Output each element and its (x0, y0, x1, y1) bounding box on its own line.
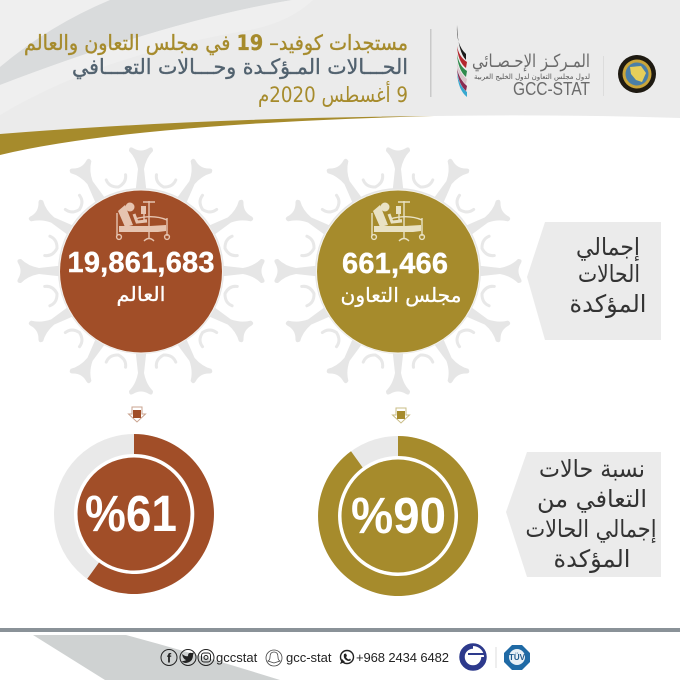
donut: GCC recovery 90% (318, 436, 478, 596)
icon: instagram (198, 650, 214, 666)
panel: recovery ratio label: المؤكدة (554, 545, 630, 573)
header band (0, 0, 680, 155)
panel: recovery ratio label: إجمالي الحالات (526, 515, 656, 544)
icon: hospital bed (117, 201, 169, 241)
panel: total confirmed label (527, 222, 661, 340)
phone number: +968 2434 6482 (356, 650, 449, 665)
handle: gcc-stat (286, 650, 332, 665)
logo Arabic name: المـركـز الإحـصـائي (472, 51, 590, 72)
panel: GCC total (316, 190, 480, 354)
virus background: world (17, 147, 265, 395)
divider (603, 56, 604, 96)
footer bar (0, 628, 680, 632)
panel: world total (59, 190, 223, 354)
arrow: GCC (392, 408, 410, 423)
GCC number: 661,466 (342, 248, 448, 280)
icon: facebook (161, 650, 177, 666)
world label: العالم (116, 282, 166, 306)
arrow: world (128, 407, 146, 422)
icon: twitter (180, 650, 196, 666)
handle: gccstat (216, 650, 258, 665)
icon: whatsapp (340, 650, 354, 664)
logo ribbons (457, 25, 467, 97)
divider (430, 29, 432, 97)
donut: world recovery 61% (64, 434, 214, 594)
panel: recovery ratio label (506, 452, 661, 577)
logo wordmark: GCC-STAT (513, 79, 590, 99)
title line 1: مستجدات كوفيد– 19 في مجلس التعاون والعالم (24, 31, 408, 56)
GCC emblem (618, 55, 656, 93)
panel: total confirmed label: إجمالي (576, 233, 640, 262)
divider (496, 647, 497, 668)
footer social and contacts (161, 650, 449, 666)
icon: snapchat (266, 650, 282, 666)
recovery value: %90 (351, 487, 446, 544)
icon: facebook: f (167, 650, 172, 666)
panel: total confirmed label: المؤكدة (570, 290, 646, 318)
certification logo (462, 646, 484, 668)
TUV logo: TÜV (509, 653, 526, 662)
virus background: GCC (274, 147, 522, 395)
recovery value: %61 (85, 485, 177, 542)
panel: total confirmed label: الحالات (578, 260, 640, 288)
GCC label: مجلس التعاون (340, 283, 462, 307)
title line 2: الحـــالات المـؤكـدة وحـــالات التعـــافي (72, 55, 408, 79)
panel: recovery ratio label: التعافي من (537, 485, 647, 513)
footer grey wedge (33, 635, 280, 680)
title (24, 31, 408, 107)
world number: 19,861,683 (68, 247, 214, 279)
panel: recovery ratio label: نسبة حالات (539, 455, 645, 483)
title line 3: date: 9 أغسطس 2020م (258, 81, 408, 107)
icon: hospital bed (372, 201, 424, 241)
GCC-STAT logo (457, 25, 590, 99)
logo subtitle: لدول مجلس التعاون لدول الخليج العربية (474, 73, 590, 81)
TUV logo (504, 645, 530, 670)
